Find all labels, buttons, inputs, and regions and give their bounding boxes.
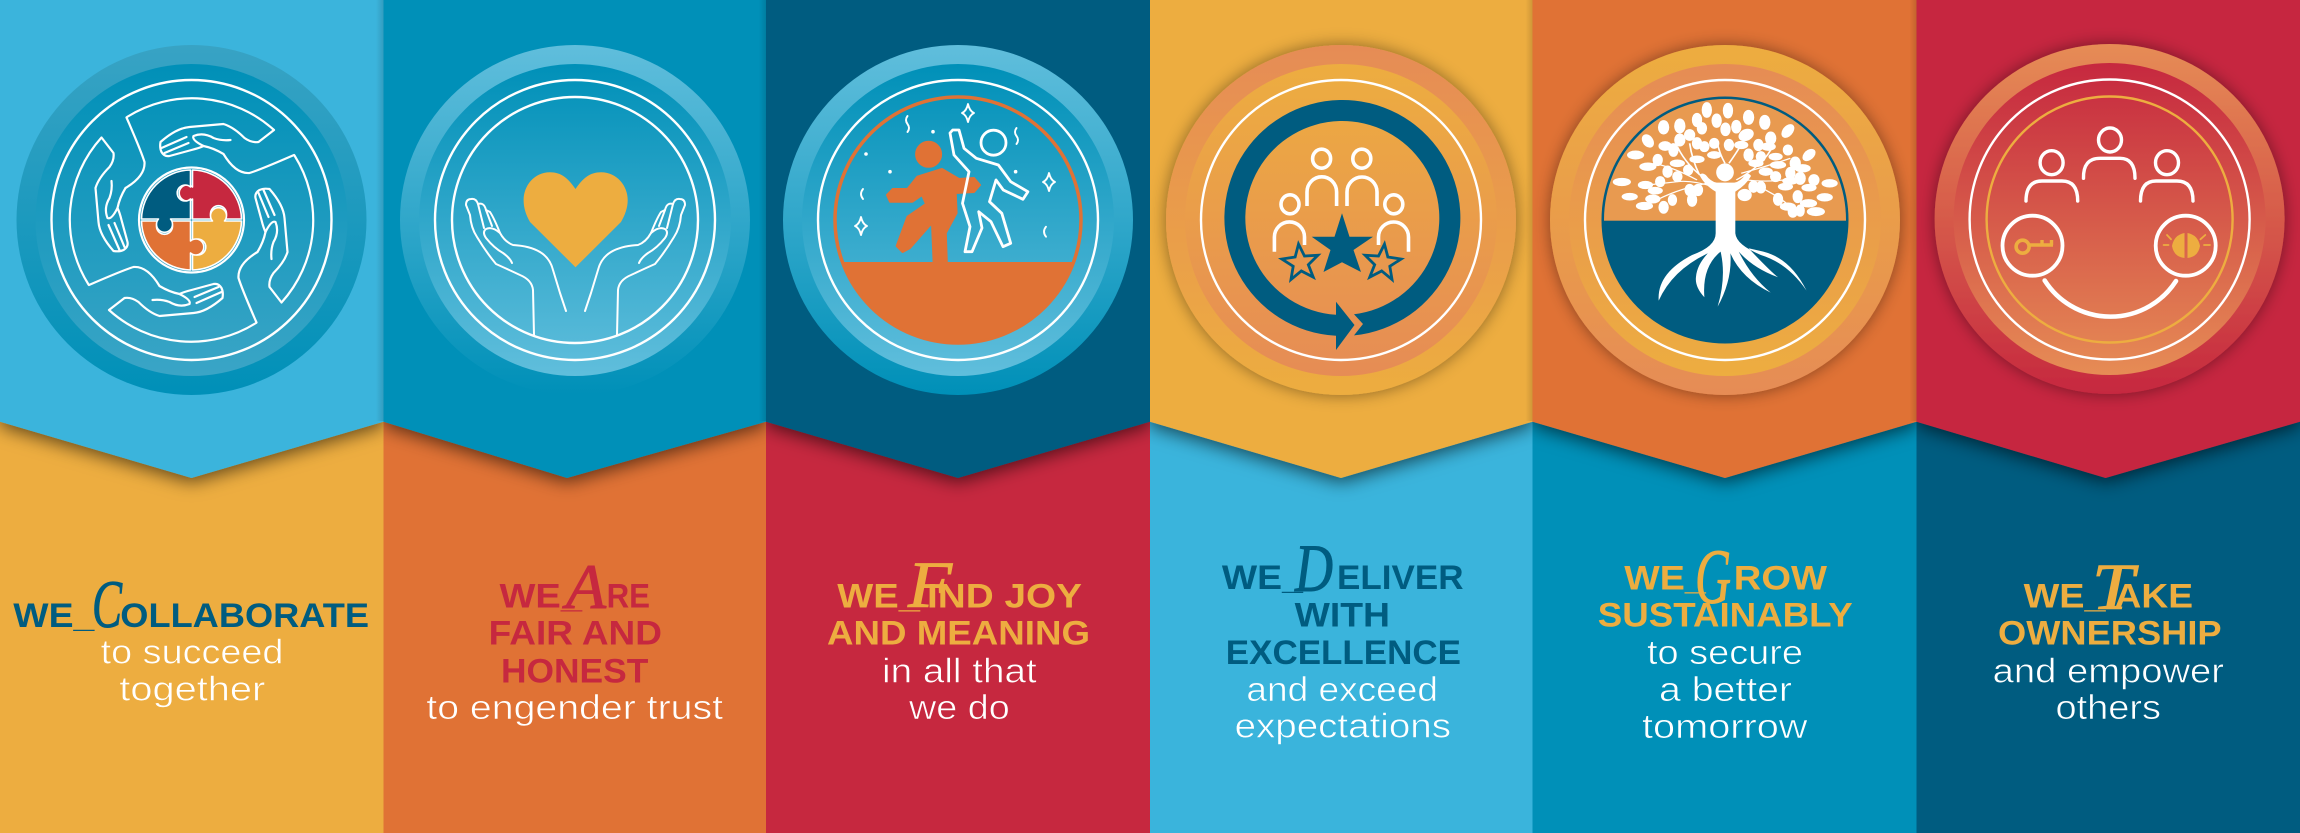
text: we collaborate to succeed together: to succeed [101, 633, 283, 671]
icon: sky half [1600, 90, 1850, 221]
text: we deliver with excellence and exceed expectations: EXCELLENCE [1226, 634, 1461, 672]
text: we are fair and honest to engender trust: WE_ [500, 578, 583, 616]
text: we are fair and honest to engender trust: RE [607, 578, 650, 616]
text: we grow sustainably to secure a better tomorrow: SUSTAINABLY [1598, 597, 1853, 635]
text: we take ownership and empower others: T [2092, 551, 2139, 624]
icon: large star [1312, 213, 1373, 272]
text: we deliver with excellence and exceed expectations: ELIVER [1337, 559, 1464, 597]
badge: tree with roots [1550, 45, 1900, 395]
text: we find joy and meaning in all that we do: WE_ [837, 578, 921, 616]
icon: dots [864, 130, 1017, 174]
banner: collaborate [0, 0, 384, 478]
text: we are fair and honest to engender trust [426, 551, 724, 727]
text: we take ownership and empower others: AKE [2114, 578, 2193, 616]
icon: left small star [1281, 242, 1320, 280]
banner: deliver with excellence [1150, 0, 1532, 478]
panel: we find joy and meaning [766, 0, 1150, 833]
text: we collaborate to succeed together: WE_ [13, 597, 95, 635]
icon: four hands [70, 98, 313, 342]
text: we grow sustainably to secure a better tomorrow: tomorrow [1642, 708, 1808, 746]
icon: white dancer [950, 130, 1028, 252]
text: we deliver with excellence and exceed expectations: D [1294, 530, 1333, 606]
text: we grow sustainably to secure a better tomorrow [1598, 533, 1853, 746]
icon: heart [524, 172, 628, 267]
text: we collaborate to succeed together [13, 566, 369, 708]
text: we grow sustainably to secure a better tomorrow: WE_ [1624, 559, 1707, 597]
text: we are fair and honest to engender trust: A [562, 551, 607, 622]
text: we collaborate to succeed together: OLLABORATE [120, 597, 369, 635]
panel: we grow sustainably [1532, 0, 1916, 833]
text: we grow sustainably to secure a better tomorrow: to secure [1647, 634, 1803, 672]
text: we collaborate to succeed together: C [92, 566, 122, 642]
text: we take ownership and empower others: OWNERSHIP [1998, 614, 2222, 652]
text: we are fair and honest to engender trust: HONEST [501, 653, 649, 691]
badge: hands around puzzle [16, 45, 366, 395]
text: we deliver with excellence and exceed expectations [1222, 530, 1464, 746]
badge: people, stars and arrow [1166, 45, 1516, 395]
icon: orange dancer [887, 142, 980, 262]
text: we deliver with excellence and exceed expectations: and exceed [1246, 671, 1438, 709]
text: we grow sustainably to secure a better tomorrow: a better [1659, 671, 1792, 709]
text: we take ownership and empower others: others [2056, 689, 2161, 727]
text: we find joy and meaning in all that we do: in all that [882, 652, 1037, 690]
icon: smile [2045, 280, 2176, 317]
banner: take ownership [1916, 0, 2300, 478]
icon: four people [1274, 149, 1408, 252]
banner: joy and meaning [766, 0, 1150, 478]
banner: grow sustainably [1532, 0, 1916, 478]
panel: we are fair and honest [384, 0, 766, 833]
text: we grow sustainably to secure a better tomorrow: ROW [1734, 559, 1828, 597]
text: we are fair and honest to engender trust: FAIR AND [489, 614, 662, 652]
icon: ground [844, 262, 1072, 342]
icon: puzzle [139, 168, 244, 272]
text: we find joy and meaning in all that we do: IND JOY [927, 578, 1082, 616]
icon: key in circle [2002, 216, 2062, 276]
icon: circular arrow [1224, 100, 1460, 350]
icon: right hand [585, 199, 685, 335]
text: we are fair and honest to engender trust: to engender trust [426, 689, 724, 727]
icon: sparkles [855, 104, 1055, 237]
text: we find joy and meaning in all that we do: AND MEANING [827, 614, 1090, 652]
icon: brain in circle [2156, 216, 2216, 276]
panel: we deliver with excellence [1150, 0, 1532, 833]
panel: we collaborate [0, 0, 384, 833]
text: we deliver with excellence and exceed expectations: expectations [1235, 708, 1451, 746]
text: we take ownership and empower others [1993, 551, 2224, 727]
text: we take ownership and empower others: and empower [1993, 652, 2224, 690]
panel: we take ownership [1916, 0, 2300, 833]
icon: right small star [1363, 242, 1402, 280]
text: we grow sustainably to secure a better tomorrow: G [1695, 533, 1731, 620]
text: we find joy and meaning in all that we do [827, 549, 1090, 727]
badge: people, key, brain, smile [1935, 44, 2285, 394]
text: we deliver with excellence and exceed expectations: WE_ [1222, 559, 1304, 597]
text: we deliver with excellence and exceed expectations: WITH [1295, 597, 1390, 635]
icon: tree [1614, 103, 1837, 307]
icon: three people [2026, 128, 2193, 201]
badge: dancing figures [783, 45, 1133, 395]
text: we find joy and meaning in all that we do: we do [908, 689, 1010, 727]
text: we take ownership and empower others: WE_ [2024, 578, 2107, 616]
banner: fair and honest [384, 0, 766, 478]
icon: left hand [466, 199, 566, 335]
text: we find joy and meaning in all that we do: F [907, 549, 953, 622]
text: we collaborate to succeed together: together [119, 670, 265, 708]
badge: heart and hands [400, 45, 750, 395]
